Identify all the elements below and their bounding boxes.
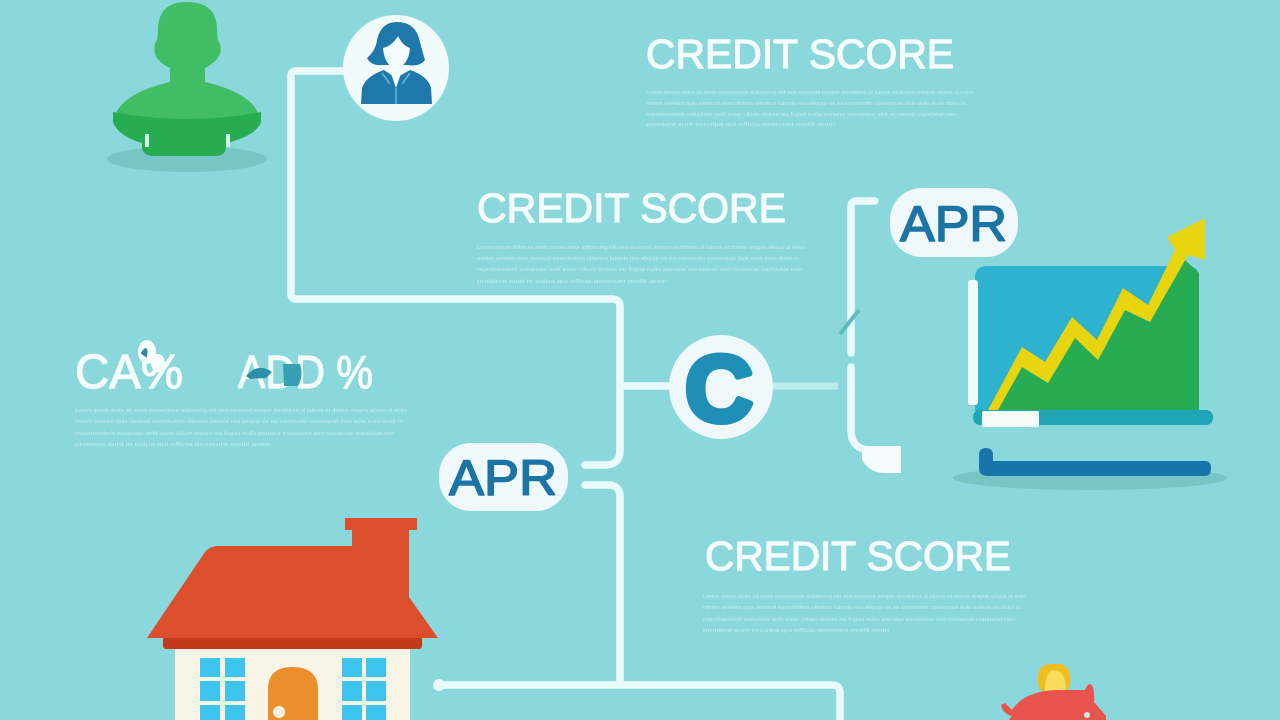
badge: APR centre <box>439 443 568 511</box>
roof eave <box>163 636 422 649</box>
left window <box>200 658 245 720</box>
connector: branch to C badge <box>624 382 672 390</box>
icon: house <box>147 518 438 720</box>
heading: ADD%: ADD % <box>238 346 373 398</box>
body lines: proident sunt in culpa qui officia deserunt mollit anim <box>477 279 667 285</box>
body lines: reprehenderit voluptate velit esse cillum dolore eu fugiat nulla pariatur excepteur sint occaecat cupidatat non <box>646 112 956 118</box>
text block: middle credit score <box>477 185 805 285</box>
connector: C badge to right bracket <box>773 382 838 390</box>
body lines: minim veniam quis nostrud exercitation ullamco laboris nisi aliquip ex ea commodo consequat duis aute irure dolor in <box>703 605 1021 611</box>
body lines: reprehenderit voluptate velit esse cillum dolore eu fugiat nulla pariatur excepteur sint occaecat cupidatat non <box>477 267 802 273</box>
heading: CREDIT SCORE <box>705 533 1011 579</box>
walls <box>175 648 410 720</box>
connector: top-left path from advisor to centre <box>291 71 620 465</box>
icon: piggy bank <box>1001 664 1106 720</box>
body lines: minim veniam quis nostrud exercitation ullamco laboris nisi aliquip ex ea commodo consequat duis aute irure dolor in <box>75 419 403 425</box>
badge: C: C <box>685 336 753 441</box>
connector: bottom horizontal line <box>433 679 840 720</box>
body lines: Lorem ipsum dolor sit amet consectetur adipiscing elit sed eiusmod tempor incididunt ut labore et dolore magna aliqua ut enim <box>646 90 973 96</box>
body lines: proident sunt in culpa qui officia deserunt mollit anim <box>75 442 271 448</box>
body lines <box>646 90 973 128</box>
connector: right bracket <box>840 201 901 473</box>
shadow <box>953 466 1227 490</box>
icon: green person <box>107 2 267 172</box>
lower bar <box>979 448 1211 476</box>
right window <box>342 658 386 720</box>
icon: advisor badge <box>343 15 449 121</box>
arrow: rising yellow zigzag <box>988 218 1205 410</box>
body lines: minim veniam quis nostrud exercitation ullamco laboris nisi aliquip ex ea commodo consequat duis aute irure dolor in <box>477 256 799 262</box>
connector: lower path from APR to bottom <box>585 485 620 685</box>
eye <box>1084 712 1090 718</box>
heading: CREDIT SCORE <box>477 185 786 231</box>
heading: CA%: CA% <box>75 346 183 399</box>
text block: top credit score <box>646 31 973 128</box>
badge: C <box>669 335 773 441</box>
body lines: reprehenderit voluptate velit esse cillum dolore eu fugiat nulla pariatur excepteur sint occaecat cupidatat non <box>75 431 395 437</box>
body lines <box>477 245 805 285</box>
text block: left percentages <box>75 340 407 448</box>
badge: APR right: APR <box>900 196 1007 252</box>
badge: APR right <box>890 188 1018 257</box>
body lines: proident sunt in culpa qui officia deserunt mollit anim <box>646 122 835 128</box>
body lines: proident sunt in culpa qui officia deserunt mollit anim <box>703 628 889 634</box>
text block: lower credit score <box>703 533 1027 634</box>
body lines: Lorem ipsum dolor sit amet consectetur adipiscing elit sed eiusmod tempor incididunt ut labore et dolore magna aliqua ut enim <box>703 594 1027 600</box>
door <box>268 667 318 720</box>
body lines <box>703 594 1027 634</box>
badge: APR centre: APR <box>449 450 557 506</box>
screen bezel <box>968 280 978 405</box>
roof and chimney <box>147 518 438 638</box>
coin <box>1038 664 1070 694</box>
screen <box>975 266 1199 411</box>
body lines: Lorem ipsum dolor sit amet consectetur adipiscing elit sed eiusmod tempor incididunt ut labore et dolore magna aliqua ut enim <box>477 245 805 251</box>
green area <box>998 260 1199 411</box>
icon: laptop with growth chart <box>953 218 1227 490</box>
base <box>973 410 1213 425</box>
heading: CREDIT SCORE <box>646 31 954 77</box>
body lines: Lorem ipsum dolor sit amet consectetur adipiscing elit sed eiusmod tempor incididunt ut labore et dolore magna aliqua ut enim <box>75 408 407 414</box>
body <box>1001 684 1106 720</box>
body lines: reprehenderit voluptate velit esse cillum dolore eu fugiat nulla pariatur excepteur sint occaecat cupidatat non <box>703 617 1015 623</box>
body lines <box>75 408 407 448</box>
body lines: minim veniam quis nostrud exercitation ullamco laboris nisi aliquip ex ea commodo consequat duis aute irure dolor in <box>646 101 966 107</box>
